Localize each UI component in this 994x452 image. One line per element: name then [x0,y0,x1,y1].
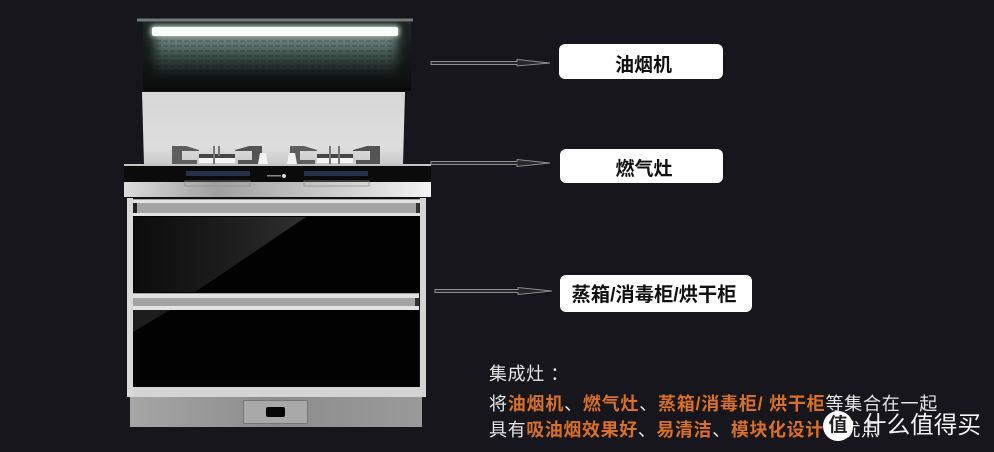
range hood [137,18,413,91]
arrow: cabinets [435,288,552,294]
cooktop counter [124,164,431,197]
label: steam box, disinfection and drying cabinets [560,275,752,312]
text: advantages: 具有吸油烟效果好、易清洁、模块化设计等优点 [489,420,880,440]
label: range hood [559,44,723,79]
upper drawer [133,199,420,293]
label: gas stove [560,149,723,183]
cabinet frame [127,197,426,397]
control knobs [258,153,297,164]
plinth [130,387,422,427]
heading: integrated stove: 集成灶 ： [489,364,569,384]
arrow: gas stove [431,160,550,166]
right burner [290,146,380,164]
watermark icon: 值 [828,415,848,436]
left burner [172,146,262,164]
label: range hood: 油烟机 [615,55,672,76]
lower drawer [133,293,419,387]
label: steam box, disinfection and drying cabinets: 蒸箱/消毒柜/烘干柜 [572,285,736,306]
watermark [823,411,981,441]
arrow: range hood [431,60,550,66]
text: integration description: 将油烟机、燃气灶、蒸箱/消毒柜/ 烘干柜等集合在一起 [489,394,938,414]
backsplash [142,92,405,165]
label: gas stove: 燃气灶 [615,159,672,180]
watermark text: 什么值得买 [863,413,981,439]
watermark icon [823,411,853,441]
